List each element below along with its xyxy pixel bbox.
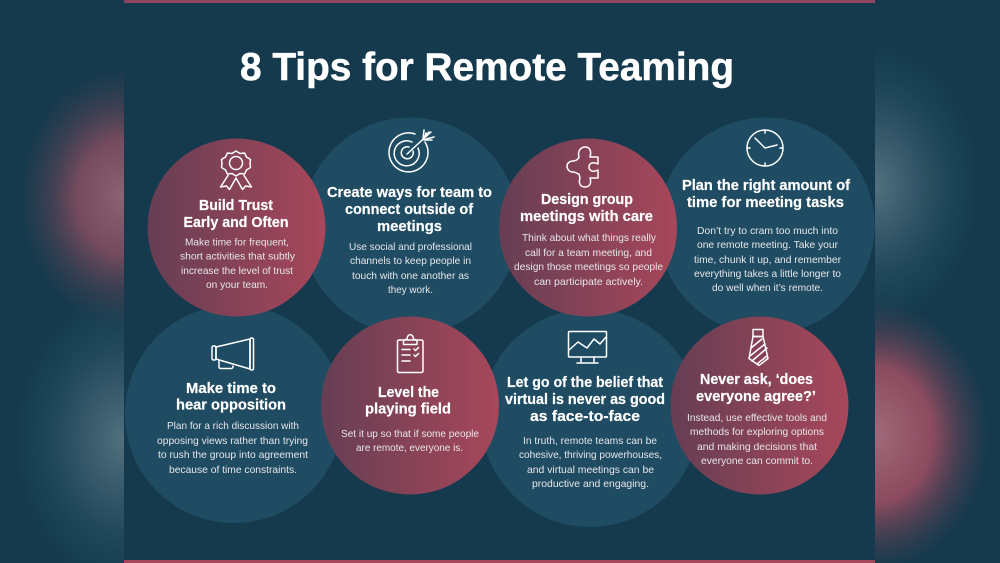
text: build trust [180, 198, 296, 291]
panel: build trust circle [148, 138, 326, 316]
text: build trust: Make time for frequent, [185, 238, 289, 248]
text: never ask: everyone can commit to. [701, 456, 813, 467]
text: level the playing field: Set it up so that if some people [341, 429, 479, 440]
text: let go of the belief: productive and engaging. [532, 479, 649, 490]
text: make time to hear opposition: Make time to [186, 381, 276, 397]
icon: clock [747, 130, 783, 166]
text: design group meetings: call for a team meeting, and [525, 248, 652, 259]
icon: puzzle piece [567, 147, 598, 187]
text: make time to hear opposition: to rush the group into agreement [158, 450, 308, 461]
text: let go of the belief [505, 375, 665, 490]
icon: megaphone [212, 338, 254, 370]
text: create ways: connect outside of [345, 202, 473, 218]
text: create ways: touch with one another as [352, 271, 469, 282]
panel: let go of the belief circle [481, 309, 699, 527]
panel: never ask circle [670, 316, 848, 494]
text: create ways: Use social and professional [349, 242, 472, 253]
text: create ways: channels to keep people in [350, 256, 471, 267]
text: make time to hear opposition: Plan for a rich discussion with [167, 421, 299, 432]
panel: make time to hear opposition circle [125, 305, 343, 523]
text: create ways: meetings [377, 219, 442, 235]
text: make time to hear opposition: because of time constraints. [169, 465, 297, 476]
text: design group meetings: meetings with care [520, 209, 653, 225]
text: let go of the belief: Let go of the belief that [507, 375, 663, 391]
text: level the playing field: playing field [365, 402, 451, 418]
icon: clipboard checklist [398, 335, 423, 372]
text: plan the right amount: Plan the right amount of [682, 178, 850, 194]
text: never ask: everyone agree?’ [696, 389, 816, 405]
text: let go of the belief: and virtual meetings can be [527, 465, 654, 476]
icon: award ribbon [220, 151, 252, 190]
icon: target with arrow [389, 130, 434, 172]
text: make time to hear opposition: hear opposition [176, 398, 286, 414]
text: create ways [327, 185, 492, 296]
text: plan the right amount [682, 178, 850, 294]
panel: create ways for team to connect circle [302, 118, 518, 334]
text: let go of the belief: as face-to-face [530, 409, 640, 425]
text: build trust: Build Trust [199, 198, 273, 214]
text: never ask: Instead, use effective tools and [687, 413, 827, 424]
icon: striped tie [749, 330, 768, 366]
text: design group meetings: can participate actively. [534, 277, 643, 288]
text: build trust: short activities that subtly [180, 252, 296, 262]
right blurred side band [875, 75, 983, 562]
panel: design group meetings circle [499, 138, 677, 316]
top accent bar [124, 0, 875, 3]
text: create ways: Create ways for team to [327, 185, 492, 201]
text: make time to hear opposition [157, 381, 308, 476]
text: plan the right amount: time, chunk it up, and remember [694, 255, 842, 266]
text: plan the right amount: do well when it’s remote. [712, 283, 823, 294]
main panel background [124, 0, 875, 563]
text: create ways: they work. [388, 285, 433, 296]
text: let go of the belief: cohesive, thriving powerhouses, [519, 450, 662, 461]
text: build trust: Early and Often [184, 215, 288, 231]
text: plan the right amount: everything takes a little longer to [694, 269, 841, 280]
text: build trust: increase the level of trust [181, 266, 293, 277]
text: level the playing field: are remote, everyone is. [356, 443, 463, 454]
text: plan the right amount: Don’t try to cram too much into [697, 226, 838, 237]
panel: level the playing field circle [321, 316, 499, 494]
bottom accent bar [124, 560, 875, 563]
text: plan the right amount: time for meeting tasks [687, 195, 844, 211]
text: design group meetings [514, 192, 663, 288]
text: never ask: Never ask, ‘does [700, 372, 813, 388]
panel: plan the right amount of time circle [658, 118, 874, 334]
text: never ask: and making decisions that [697, 442, 817, 453]
text: design group meetings: Think about what things really [522, 233, 657, 244]
text: build trust: on your team. [206, 280, 268, 291]
left blurred side band [26, 78, 124, 558]
icon: monitor with line chart [568, 332, 606, 363]
text: make time to hear opposition: opposing views rather than trying [157, 436, 308, 447]
text: design group meetings: design those meetings so people [514, 262, 663, 273]
text: never ask: methods for exploring options [690, 427, 824, 438]
text: level the playing field: Level the [378, 385, 439, 401]
text: design group meetings: Design group [541, 192, 633, 208]
text: plan the right amount: one remote meeting. Take your [697, 240, 839, 251]
text: level the playing field [341, 385, 479, 454]
text: never ask [687, 372, 827, 467]
title: 8 Tips for Remote Teaming [240, 46, 734, 89]
text: let go of the belief: In truth, remote teams can be [523, 436, 657, 447]
text: let go of the belief: virtual is never as good [505, 392, 665, 408]
